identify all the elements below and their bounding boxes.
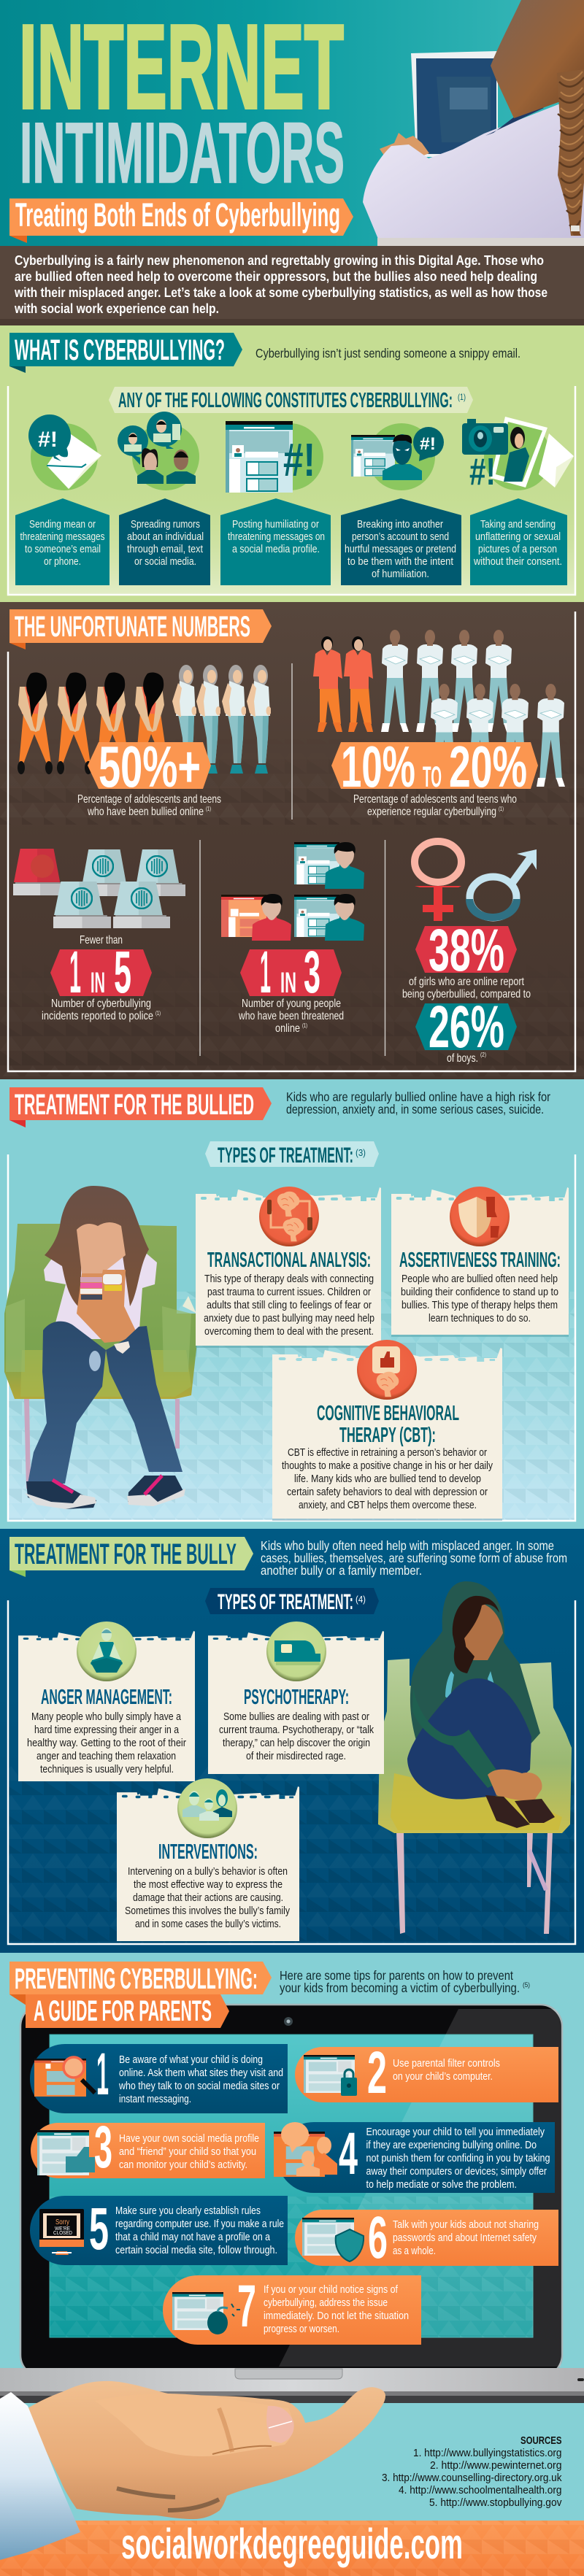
lead text: (5) xyxy=(523,1981,530,1989)
photo: hooded girl hugging knees in chair xyxy=(378,1581,572,1934)
tip 1: 1 xyxy=(96,2041,109,2108)
icon: shield over profile xyxy=(302,2218,364,2261)
body xyxy=(219,1711,374,1762)
sources: SOURCES xyxy=(520,2434,562,2447)
body: CBT is effective in retraining a person’s behavior or xyxy=(288,1446,487,1459)
card: breaking into account: to be them with the intent xyxy=(347,555,454,568)
banner: types of treatment: TYPES OF TREATMENT: xyxy=(218,1590,353,1614)
tip text: that a child may not have a profile on a xyxy=(115,2231,271,2243)
card: spreading rumors xyxy=(119,498,210,585)
title: PSYCHOTHERAPY: xyxy=(244,1686,349,1709)
card: unflattering pictures: unflattering or sexual xyxy=(475,531,561,543)
heading ribbon: treatment for the bully: TREATMENT FOR THE BULLY xyxy=(15,1538,237,1570)
body: building their confidence to stand up to xyxy=(401,1286,558,1298)
tip text xyxy=(393,2057,500,2083)
panel: treatment for the bullied xyxy=(0,1079,584,1529)
badge: 10% to 20%: TO xyxy=(423,761,442,793)
title xyxy=(317,1402,459,1447)
tip text: instant messaging. xyxy=(119,2093,191,2105)
badge: 38%: 38% xyxy=(429,917,504,984)
caption: Percentage of adolescents and teens xyxy=(77,793,221,806)
panel: treatment for the bully xyxy=(0,1529,584,1953)
heading ribbon: treatment for the bully xyxy=(9,1537,253,1577)
sources: 1. http://www.bullyingstatistics.org xyxy=(413,2447,562,2459)
figures: ten boys xyxy=(313,630,565,787)
card: breaking into account: hurtful messages or pretend xyxy=(345,543,456,555)
card: sending mean messages: Sending mean or xyxy=(29,518,96,531)
icon: closed sign on monitor: Sorry xyxy=(55,2218,69,2226)
number 2: 2 xyxy=(367,2040,387,2106)
icon: three threatened users xyxy=(221,842,364,941)
badge: 50%+: 50%+ xyxy=(99,734,201,799)
body: Intervening on a bully’s behavior is often xyxy=(128,1865,288,1878)
tip 6 xyxy=(295,2205,558,2271)
body: the most effective way to express the xyxy=(134,1878,283,1891)
title: THERAPY (CBT): xyxy=(339,1424,436,1447)
illustration: hand holding tablet xyxy=(0,2381,385,2560)
number 5: 5 xyxy=(89,2196,109,2262)
card: unflattering pictures: Taking and sending xyxy=(480,518,556,531)
body: overcoming them to deal with the present. xyxy=(204,1325,374,1338)
caption: (1) xyxy=(155,1010,161,1017)
tip 4 xyxy=(274,2121,555,2193)
icon: closed sign on monitor xyxy=(39,2209,84,2255)
body xyxy=(125,1865,290,1930)
caption: girls xyxy=(402,976,531,1000)
lead text xyxy=(261,1538,567,1578)
caption: Number of young people xyxy=(242,998,341,1010)
tip text: not punish them for confiding in you by taking xyxy=(366,2152,550,2164)
body: certain safety behaviors to deal with depression or xyxy=(287,1486,488,1498)
badge: 10% to 20% xyxy=(331,734,538,799)
heading ribbon: preventing cyberbullying: PREVENTING CYBERBULLYING: xyxy=(15,1963,258,1995)
tip text: regarding computer use. If you make a rule xyxy=(115,2218,284,2230)
body: learn techniques to do so. xyxy=(429,1312,531,1324)
body: anxiety, and CBT helps them overcome these. xyxy=(299,1499,477,1511)
banner: types of treatment: (3) xyxy=(356,1147,366,1158)
heading ribbon: treatment for the bullied: TREATMENT FOR THE BULLIED xyxy=(15,1089,254,1121)
body: healthy way. Getting to the root of their xyxy=(27,1737,186,1749)
card: posting humiliating messages: a social media profile. xyxy=(232,543,320,555)
icon: shield and fist xyxy=(450,1187,510,1246)
body: current trauma. Psychotherapy, or “talk xyxy=(219,1724,374,1736)
card: transactional analysis xyxy=(196,1187,381,1348)
caption: Percentage of adolescents and teens who xyxy=(353,793,517,806)
tip text xyxy=(115,2205,284,2256)
card: unflattering pictures: pictures of a person xyxy=(478,543,557,555)
heading ribbon: unfortunate numbers xyxy=(9,609,272,649)
heading ribbon: a guide for parents xyxy=(26,1994,229,2028)
banner: types of treatment xyxy=(205,1141,379,1168)
tip text xyxy=(264,2283,409,2335)
photo: girl in chair covering her face xyxy=(4,1186,197,1509)
card: breaking into account: of humiliation. xyxy=(372,568,429,580)
badge: 10% to 20%: 10% xyxy=(341,734,415,799)
banner: types of treatment: TYPES OF TREATMENT: xyxy=(218,1144,353,1168)
badge: 1 in 3: IN xyxy=(280,967,296,999)
caption: (1) xyxy=(302,1022,307,1029)
icon: hacker: #! xyxy=(420,434,436,454)
shirt cuff xyxy=(0,2392,80,2560)
card: spreading rumors: or social media. xyxy=(134,555,196,568)
body xyxy=(27,1711,186,1775)
body xyxy=(204,1273,374,1338)
stat: 38 percent girls 26 percent boys xyxy=(402,841,537,1065)
heading ribbon: what is cyberbullying xyxy=(9,333,242,373)
card: breaking into account: Breaking into another xyxy=(357,518,443,531)
caption: who have been threatened xyxy=(238,1010,344,1022)
badge: 38% xyxy=(415,917,517,984)
heading ribbon: what is cyberbullying: WHAT IS CYBERBULLYING? xyxy=(15,334,225,366)
tip text xyxy=(393,2218,539,2257)
banner: types of treatment xyxy=(205,1588,379,1614)
body: damage that their actions are causing. xyxy=(133,1891,283,1904)
intro paragraph xyxy=(14,253,548,316)
section lead text: Cyberbullying isn’t just sending someone a snippy email. xyxy=(256,346,520,360)
title: INTERVENTIONS: xyxy=(158,1840,258,1864)
icon: camera and photo: #! xyxy=(469,451,496,493)
body: hard time expressing their anger in a xyxy=(34,1724,180,1736)
card: sending mean messages xyxy=(15,498,110,585)
tip text: progress or worsen. xyxy=(264,2323,339,2335)
intro paragraph: with social work experience can help. xyxy=(14,301,219,316)
badge: 1 in 3: 1 xyxy=(260,939,271,1006)
caption: (1) xyxy=(499,806,504,812)
caption: (1) xyxy=(206,806,211,812)
number 4: 4 xyxy=(339,2121,358,2187)
caption xyxy=(353,793,517,818)
banner: constitutes: (1) xyxy=(458,392,466,402)
caption: incidents reported to police xyxy=(42,1010,153,1022)
tip text: If you or your child notice signs of xyxy=(264,2283,399,2296)
card: unflattering pictures: without their consent. xyxy=(473,555,562,568)
icon: magnifier over profile xyxy=(34,2057,95,2097)
body xyxy=(282,1446,493,1511)
heading ribbon: unfortunate numbers: THE UNFORTUNATE NUMBERS xyxy=(15,611,250,643)
caption: boys: (2) xyxy=(480,1052,486,1058)
banner: types of treatment: (4) xyxy=(356,1594,366,1605)
lead text: Here are some tips for parents on how to prevent xyxy=(280,1968,513,1983)
card: sending mean messages: to someone’s email xyxy=(25,543,101,555)
card: interventions xyxy=(117,1778,299,1941)
card: sending mean messages: threatening messages xyxy=(20,531,105,543)
title: internet intimidators xyxy=(19,0,345,201)
icon: police sirens xyxy=(13,849,185,928)
sources: 2. http://www.pewinternet.org xyxy=(430,2459,562,2472)
tip text: Talk with your kids about not sharing xyxy=(393,2218,539,2231)
icon: thumbs up over brain xyxy=(357,1340,417,1400)
caption xyxy=(42,998,161,1022)
tip text: passwords and about Internet safety xyxy=(393,2232,537,2244)
icon: social media profile xyxy=(226,421,323,493)
icon: male symbol xyxy=(466,849,537,921)
caption: experience regular cyberbullying xyxy=(367,806,496,818)
panel: what is cyberbullying xyxy=(0,325,584,602)
badge: 1 in 5 xyxy=(50,939,152,1006)
icon: closed sign on monitor: WE’RE xyxy=(55,2225,70,2232)
title: ANGER MANAGEMENT: xyxy=(41,1686,172,1709)
lead text xyxy=(280,1968,530,1995)
title: COGNITIVE BEHAVIORAL xyxy=(317,1402,459,1425)
stat: 1 in 5 xyxy=(13,849,185,1022)
tip text xyxy=(119,2132,259,2171)
card: cognitive behavioral therapy xyxy=(272,1340,502,1521)
card: unflattering pictures xyxy=(470,498,567,585)
body: techniques is usually very helpful. xyxy=(40,1763,174,1775)
tip text xyxy=(118,2054,283,2105)
card: breaking into account xyxy=(341,498,461,585)
body: This type of therapy deals with connecting xyxy=(204,1273,374,1285)
tip text: away their computers or devices; simply offer xyxy=(366,2165,547,2178)
icon: two brains connected xyxy=(259,1187,319,1246)
number 3: 3 xyxy=(94,2114,112,2180)
badge: 26%: 26% xyxy=(429,994,504,1060)
body: life. Many kids who are bullied tend to develop xyxy=(294,1473,481,1485)
stat: 50 percent bullied online xyxy=(18,665,272,818)
body: and in some cases the bully’s victims. xyxy=(135,1918,281,1930)
tip text: online. Ask them what sites they visit and xyxy=(119,2067,283,2079)
title: TRANSACTIONAL ANALYSIS: xyxy=(207,1249,371,1272)
tip 5 xyxy=(30,2196,288,2265)
number 6: 6 xyxy=(368,2205,388,2271)
card: psychotherapy xyxy=(208,1621,384,1774)
tip text: Encourage your child to tell you immediately xyxy=(366,2126,545,2138)
sources xyxy=(382,2434,562,2509)
body: anger and teaching them relaxation xyxy=(36,1750,176,1762)
tip text: and “friend” your child so that you xyxy=(119,2145,256,2158)
sources: 5. http://www.stopbullying.gov xyxy=(429,2496,562,2509)
stat: 10 to 20 percent xyxy=(313,630,565,818)
tip text: immediately. Do not let the situation xyxy=(264,2310,409,2322)
lead text: your kids from becoming a victim of cyberbullying. xyxy=(280,1981,520,1995)
badge: 26% xyxy=(415,994,517,1060)
card: spreading rumors: about an individual xyxy=(127,531,204,543)
tip text: Have your own social media profile xyxy=(119,2132,259,2145)
card: posting humiliating messages: threatening messages on xyxy=(228,531,325,543)
caption: Number of cyberbullying xyxy=(51,998,151,1010)
tip text: cyberbullying, address the issue xyxy=(264,2297,388,2309)
card: spreading rumors: through email, text xyxy=(127,543,204,555)
panel: intro text xyxy=(0,246,584,325)
tip text xyxy=(366,2126,550,2191)
lead text: another bully or a family member. xyxy=(261,1563,422,1578)
tip text: on your child’s computer. xyxy=(393,2070,493,2083)
number 7: 7 xyxy=(237,2273,256,2340)
icon: female symbol xyxy=(415,841,461,921)
tip text: as a whole. xyxy=(393,2245,436,2257)
header background xyxy=(0,0,584,246)
stat: 1 in 3 xyxy=(221,842,364,1035)
badge: 1 in 3: 3 xyxy=(304,939,320,1006)
body: Sometimes this involves the bully’s family xyxy=(125,1905,290,1917)
card: assertiveness training xyxy=(391,1187,569,1337)
badge: 1 in 3 xyxy=(240,939,342,1006)
text: fewer than: Fewer than xyxy=(80,934,123,946)
tablet stand bar xyxy=(0,2368,584,2403)
body: therapy,” can help discover the origin xyxy=(223,1737,370,1749)
card: posting humiliating messages xyxy=(220,498,331,585)
tip 2 xyxy=(295,2040,558,2106)
tip 1 xyxy=(30,2041,288,2113)
card: posting humiliating messages: Posting humiliating or xyxy=(232,518,319,531)
icon: email threat: #! xyxy=(38,428,58,452)
body xyxy=(401,1273,558,1324)
tip text: Use parental filter controls xyxy=(393,2057,500,2070)
subtitle ribbon xyxy=(9,196,353,243)
icon: social media profile: #! xyxy=(283,433,315,486)
tip text: if they are experiencing bullying online. Do xyxy=(366,2139,537,2151)
badge: 1 in 5: 5 xyxy=(114,939,131,1006)
caption: boys: of boys. xyxy=(447,1052,478,1065)
footer band xyxy=(0,2521,584,2576)
caption: who have been bullied online xyxy=(87,806,204,818)
icon: rumors xyxy=(118,412,199,490)
caption: girls: being cyberbullied, compared to xyxy=(402,988,531,1000)
icon: email threat xyxy=(28,414,101,490)
body: Some bullies are dealing with past or xyxy=(223,1711,369,1723)
caption: girls: of girls who are online report xyxy=(409,976,524,988)
subtitle ribbon: Treating Both Ends of Cyberbullying xyxy=(15,196,340,234)
sources: 3. http://www.counselling-directory.org.uk xyxy=(382,2472,562,2484)
tip text: Be aware of what your child is doing xyxy=(119,2054,263,2066)
heading ribbon: preventing cyberbullying xyxy=(9,1962,272,2005)
photo: girl at laptop from behind xyxy=(363,0,584,246)
body: past trauma to current issues. Children or xyxy=(207,1286,371,1298)
badge: 10% to 20%: 20% xyxy=(449,734,527,799)
badge: 1 in 5: IN xyxy=(91,967,105,999)
body: thoughts to make a positive change in his or her daily xyxy=(282,1459,493,1472)
body: adults that still cling to feelings of fear or xyxy=(207,1299,372,1311)
panel: preventing cyberbullying xyxy=(0,1953,584,2522)
icon: meditating figure xyxy=(77,1621,137,1681)
caption: online xyxy=(275,1022,300,1035)
tip text: certain social media site, follow through. xyxy=(115,2244,277,2256)
card: spreading rumors: Spreading rumors xyxy=(131,518,200,531)
tablet device xyxy=(20,2005,562,2377)
tip text: Make sure you clearly establish rules xyxy=(115,2205,261,2217)
body: anxiety due to past bullying may need help xyxy=(204,1312,374,1324)
banner: constitutes xyxy=(109,387,473,413)
badge: 50%+ xyxy=(88,734,211,799)
body: of their misdirected rage. xyxy=(246,1750,346,1762)
card: anger management xyxy=(18,1621,195,1781)
icon: talking parent and child xyxy=(274,2122,337,2177)
icon: thumbs up profile xyxy=(37,2130,95,2175)
icon: hacker xyxy=(351,423,444,490)
tip text: can monitor your child’s activity. xyxy=(119,2159,247,2171)
icon: bomb on profile xyxy=(172,2292,240,2334)
lead text xyxy=(286,1090,550,1117)
heading ribbon: treatment for the bullied xyxy=(9,1087,272,1127)
panel: the unfortunate numbers xyxy=(0,602,584,1079)
tip 3 xyxy=(31,2114,265,2180)
caption xyxy=(238,998,344,1035)
icon: therapy couch xyxy=(266,1621,326,1681)
sources: 4. http://www.schoolmentalhealth.org xyxy=(399,2484,562,2496)
tip text: who they talk to on social media sites or xyxy=(118,2080,280,2092)
icon: family group xyxy=(177,1778,237,1838)
icon: closed sign on monitor: CLOSED xyxy=(53,2229,72,2236)
caption xyxy=(77,793,221,818)
card: sending mean messages: or phone. xyxy=(44,555,81,568)
tip 7 xyxy=(163,2273,421,2345)
icon: camera and photo xyxy=(462,417,574,493)
body: Many people who bully simply have a xyxy=(31,1711,182,1723)
icon: locked profile xyxy=(304,2055,357,2096)
badge: 1 in 5: 1 xyxy=(69,939,81,1006)
card: breaking into account: person’s account to send xyxy=(352,531,449,543)
heading ribbon: a guide for parents: A GUIDE FOR PARENTS xyxy=(34,1995,212,2027)
tip text: to help mediate or solve the problem. xyxy=(366,2178,517,2191)
figures: eight girls xyxy=(18,665,272,774)
